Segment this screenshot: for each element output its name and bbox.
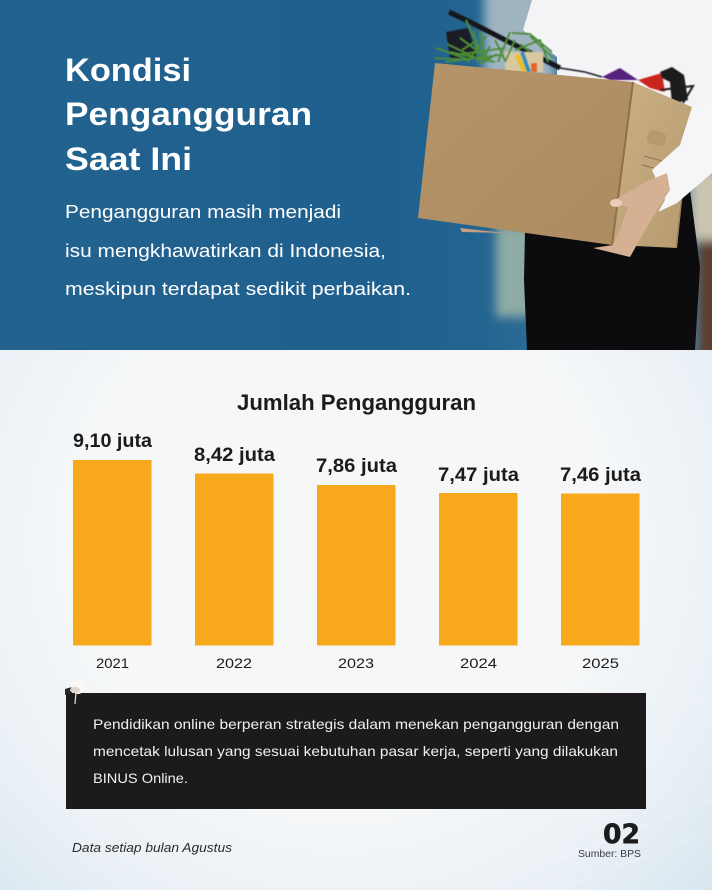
bar 2022: 2022 xyxy=(216,655,252,671)
photo: black skirt xyxy=(524,190,700,350)
subtitle text: Pengangguran masih menjadi xyxy=(65,202,341,222)
subtitle text xyxy=(65,202,411,299)
bar 2023 xyxy=(316,456,397,671)
title xyxy=(66,58,310,170)
bar 2021 xyxy=(73,431,152,671)
header panel with photo xyxy=(0,0,712,360)
callout panel: Pendidikan online berperan strategis dalam menekan pengangguran dengan xyxy=(93,716,619,732)
icon: push pin xyxy=(65,676,85,704)
callout panel: BINUS Online. xyxy=(93,770,188,786)
bar 2025: 2025 xyxy=(582,655,619,671)
title: Saat Ini xyxy=(65,141,192,177)
source: Sumber: BPS xyxy=(578,848,641,860)
bar 2022: 8,42 juta xyxy=(194,445,275,466)
chart title: Jumlah Pengangguran xyxy=(237,390,476,415)
bar 2023: 7,86 juta xyxy=(316,456,397,477)
photo: cardboard box xyxy=(418,63,692,248)
bar 2025 xyxy=(560,465,641,671)
title: Pengangguran xyxy=(65,96,312,132)
subtitle text: isu mengkhawatirkan di Indonesia, xyxy=(65,241,386,261)
lower section background xyxy=(0,350,712,890)
bar 2025: 7,46 juta xyxy=(560,465,641,486)
title: Kondisi xyxy=(65,52,191,88)
subtitle text: meskipun terdapat sedikit perbaikan. xyxy=(65,279,411,299)
page number: 02 xyxy=(603,819,640,850)
photo: plant and items xyxy=(434,12,693,104)
bar 2024: 7,47 juta xyxy=(438,465,519,486)
callout panel xyxy=(66,693,646,809)
photo: shirt sleeve xyxy=(652,100,712,212)
bar chart xyxy=(73,431,641,671)
bar 2021: 9,10 juta xyxy=(73,431,152,452)
bar 2024: 2024 xyxy=(460,655,497,671)
photo: white shirt xyxy=(523,0,712,120)
bar 2024 xyxy=(438,465,519,671)
footnote: Data setiap bulan Agustus xyxy=(72,840,233,855)
photo: hand xyxy=(593,173,670,257)
callout panel: mencetak lulusan yang sesuai kebutuhan pasar kerja, seperti yang dilakukan xyxy=(93,743,618,759)
photo backdrop xyxy=(484,0,712,360)
bar 2021: 2021 xyxy=(96,655,129,671)
bar 2022 xyxy=(194,445,275,671)
bar 2023: 2023 xyxy=(338,655,374,671)
